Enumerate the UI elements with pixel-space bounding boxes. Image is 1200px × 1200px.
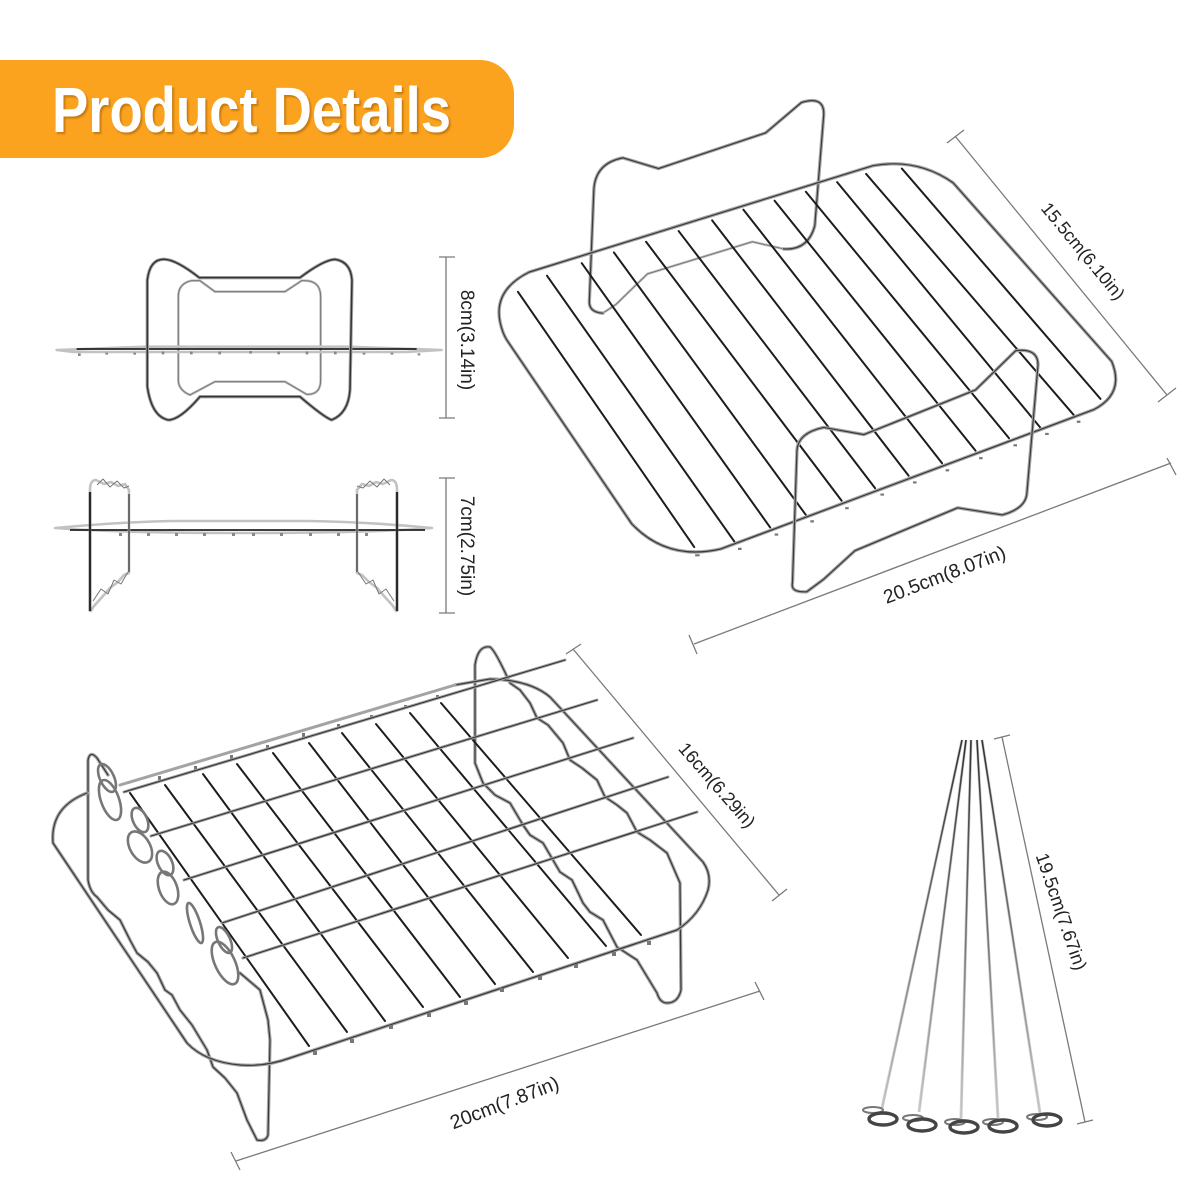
banner: product details [0,60,514,158]
left handle [90,479,129,612]
left wavy handle [88,754,270,1140]
rack with skewers, perspective view [53,647,709,1140]
right wavy handle [475,647,681,1003]
right handle [357,479,397,612]
rack edge [55,521,432,536]
bars [518,169,1100,547]
rack outline [53,679,709,1065]
rack edge [57,347,442,356]
bars [130,703,641,1046]
back handle [589,101,824,313]
front handle [792,350,1038,592]
dimension: 16cm: 16cm(6.29in) [675,739,759,832]
dimension: 7cm: 7cm(2.75in) [456,496,477,596]
skewers group [863,740,1061,1133]
dimension: 7cm [439,478,477,613]
outer handle [147,259,352,420]
skewer rings [94,761,244,988]
skewer wires [882,740,1040,1118]
dimension: 20cm [231,982,764,1170]
dimension: 15.5cm: 15.5cm(6.10in) [1037,199,1129,304]
rack outline [499,164,1116,556]
dimension: 19.5cm: 19.5cm(7.67in) [1032,850,1091,973]
dimension: 19.5cm [994,735,1093,1124]
front side view: rack with handles [57,259,442,420]
dimension: 20.5cm [689,458,1176,654]
side view: rack with short handles [55,479,432,612]
dimension: 15.5cm [947,130,1176,402]
dimension: 20.5cm: 20.5cm(8.07in) [880,542,1009,609]
dimension: 20cm: 20cm(7.87in) [447,1072,562,1134]
rack with handles, perspective view [499,101,1116,592]
heading: Product Details [52,74,451,146]
inner handle [178,281,321,395]
skewer loops [863,1107,1061,1133]
dimension: 8cm [439,257,477,418]
dimension: 16cm [566,644,787,901]
skewers [120,660,697,958]
dimension: 8cm: 8cm(3.14in) [456,290,477,390]
